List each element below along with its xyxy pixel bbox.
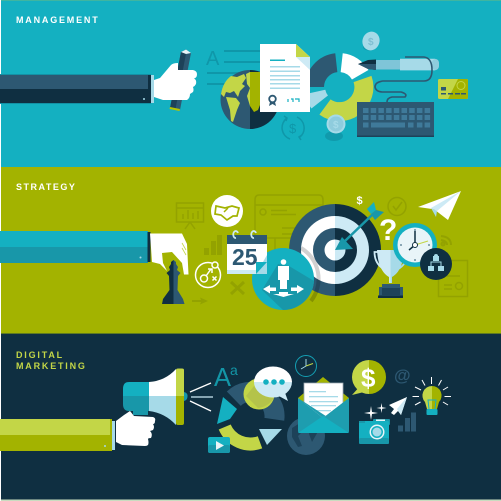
icon: keyboard cable bbox=[375, 57, 432, 102]
ghost icon: text lines bbox=[206, 48, 260, 85]
ghost icon: bars bbox=[204, 235, 222, 255]
icon: camera bbox=[359, 419, 390, 444]
icon: megaphone bbox=[123, 368, 213, 425]
icon: document bbox=[260, 44, 310, 112]
icon: envelope bbox=[298, 377, 349, 433]
ghost icon: browser window bbox=[255, 195, 323, 262]
ghost icon: arrow bbox=[192, 298, 208, 304]
icon: trophy bbox=[374, 250, 408, 298]
icon: dollar cycle bbox=[282, 116, 304, 140]
icon: light bulb bbox=[412, 377, 451, 415]
ghost icon: globe bbox=[287, 417, 325, 455]
icon: white hand holding pen bbox=[154, 63, 197, 100]
icon: top coin: $ bbox=[368, 37, 374, 48]
text: question mark: ? bbox=[379, 214, 397, 247]
icon: dart arrow bbox=[335, 202, 384, 250]
ghost icon: check circle bbox=[388, 198, 406, 216]
icon: calendar: 25 bbox=[232, 244, 258, 270]
icon: dollar cycle: $ bbox=[289, 121, 297, 136]
icon: sparkles bbox=[364, 403, 386, 420]
sleeve: management arm bbox=[0, 74, 154, 104]
icon: handshake badge bbox=[211, 195, 243, 227]
heading: strategy: STRATEGY bbox=[16, 182, 76, 192]
icon: video button bbox=[208, 437, 230, 453]
ghost icon: certificate bbox=[438, 260, 468, 296]
icon: clock bbox=[393, 223, 437, 267]
icon: team badge bbox=[420, 248, 452, 280]
icon: white hand bbox=[116, 411, 155, 446]
icon: letters Aa: a bbox=[230, 362, 238, 378]
icon: speech bubbles bbox=[244, 366, 292, 410]
icon: strategy play bbox=[196, 262, 220, 288]
ghost icon: text lines: A bbox=[206, 48, 220, 70]
sleeve: marketing arm bbox=[0, 419, 115, 451]
icon: dollar bubble bbox=[352, 360, 386, 395]
heading: digital marketing: DIGITAL bbox=[16, 350, 64, 360]
icon: calendar bbox=[227, 231, 267, 274]
icon: pen in hand bbox=[170, 50, 191, 111]
icon: chess piece bbox=[162, 260, 184, 304]
ghost icon: wifi bbox=[441, 236, 451, 246]
icon: doughnut chart bbox=[217, 392, 282, 445]
panel: digital marketing bbox=[0, 334, 501, 501]
icon: keyboard bbox=[357, 102, 434, 137]
icon: globe bbox=[220, 70, 280, 129]
icon: letters Aa: A bbox=[214, 362, 232, 392]
icon: fountain pen bbox=[358, 59, 439, 70]
icon: credit card bbox=[438, 79, 468, 99]
sleeve: strategy arm bbox=[0, 231, 150, 263]
text: dollar sign: $ bbox=[356, 195, 363, 207]
panel: management bbox=[0, 1, 501, 167]
heading: digital marketing: MARKETING bbox=[16, 361, 87, 371]
icon: cursor arrow bbox=[389, 397, 407, 415]
ghost icon: clock bbox=[296, 356, 316, 376]
icon: at sign: @ bbox=[394, 366, 411, 385]
icon: bars bbox=[398, 412, 416, 432]
icon: bottom coin bbox=[325, 114, 346, 141]
icon: bottom coin: $ bbox=[333, 120, 339, 131]
heading: management: MANAGEMENT bbox=[16, 15, 100, 25]
icon: person badge bbox=[252, 248, 319, 310]
icon: target bbox=[289, 204, 381, 296]
icon: doughnut chart bbox=[314, 63, 364, 112]
panel: strategy bbox=[0, 167, 501, 334]
icon: paper plane bbox=[418, 191, 461, 220]
ghost icon: presentation board bbox=[176, 203, 204, 229]
icon: dollar bubble: $ bbox=[361, 363, 376, 393]
icon: top coin bbox=[360, 29, 382, 53]
icon: white hand on chess piece bbox=[150, 234, 188, 274]
ghost icon: tools bbox=[231, 282, 244, 294]
